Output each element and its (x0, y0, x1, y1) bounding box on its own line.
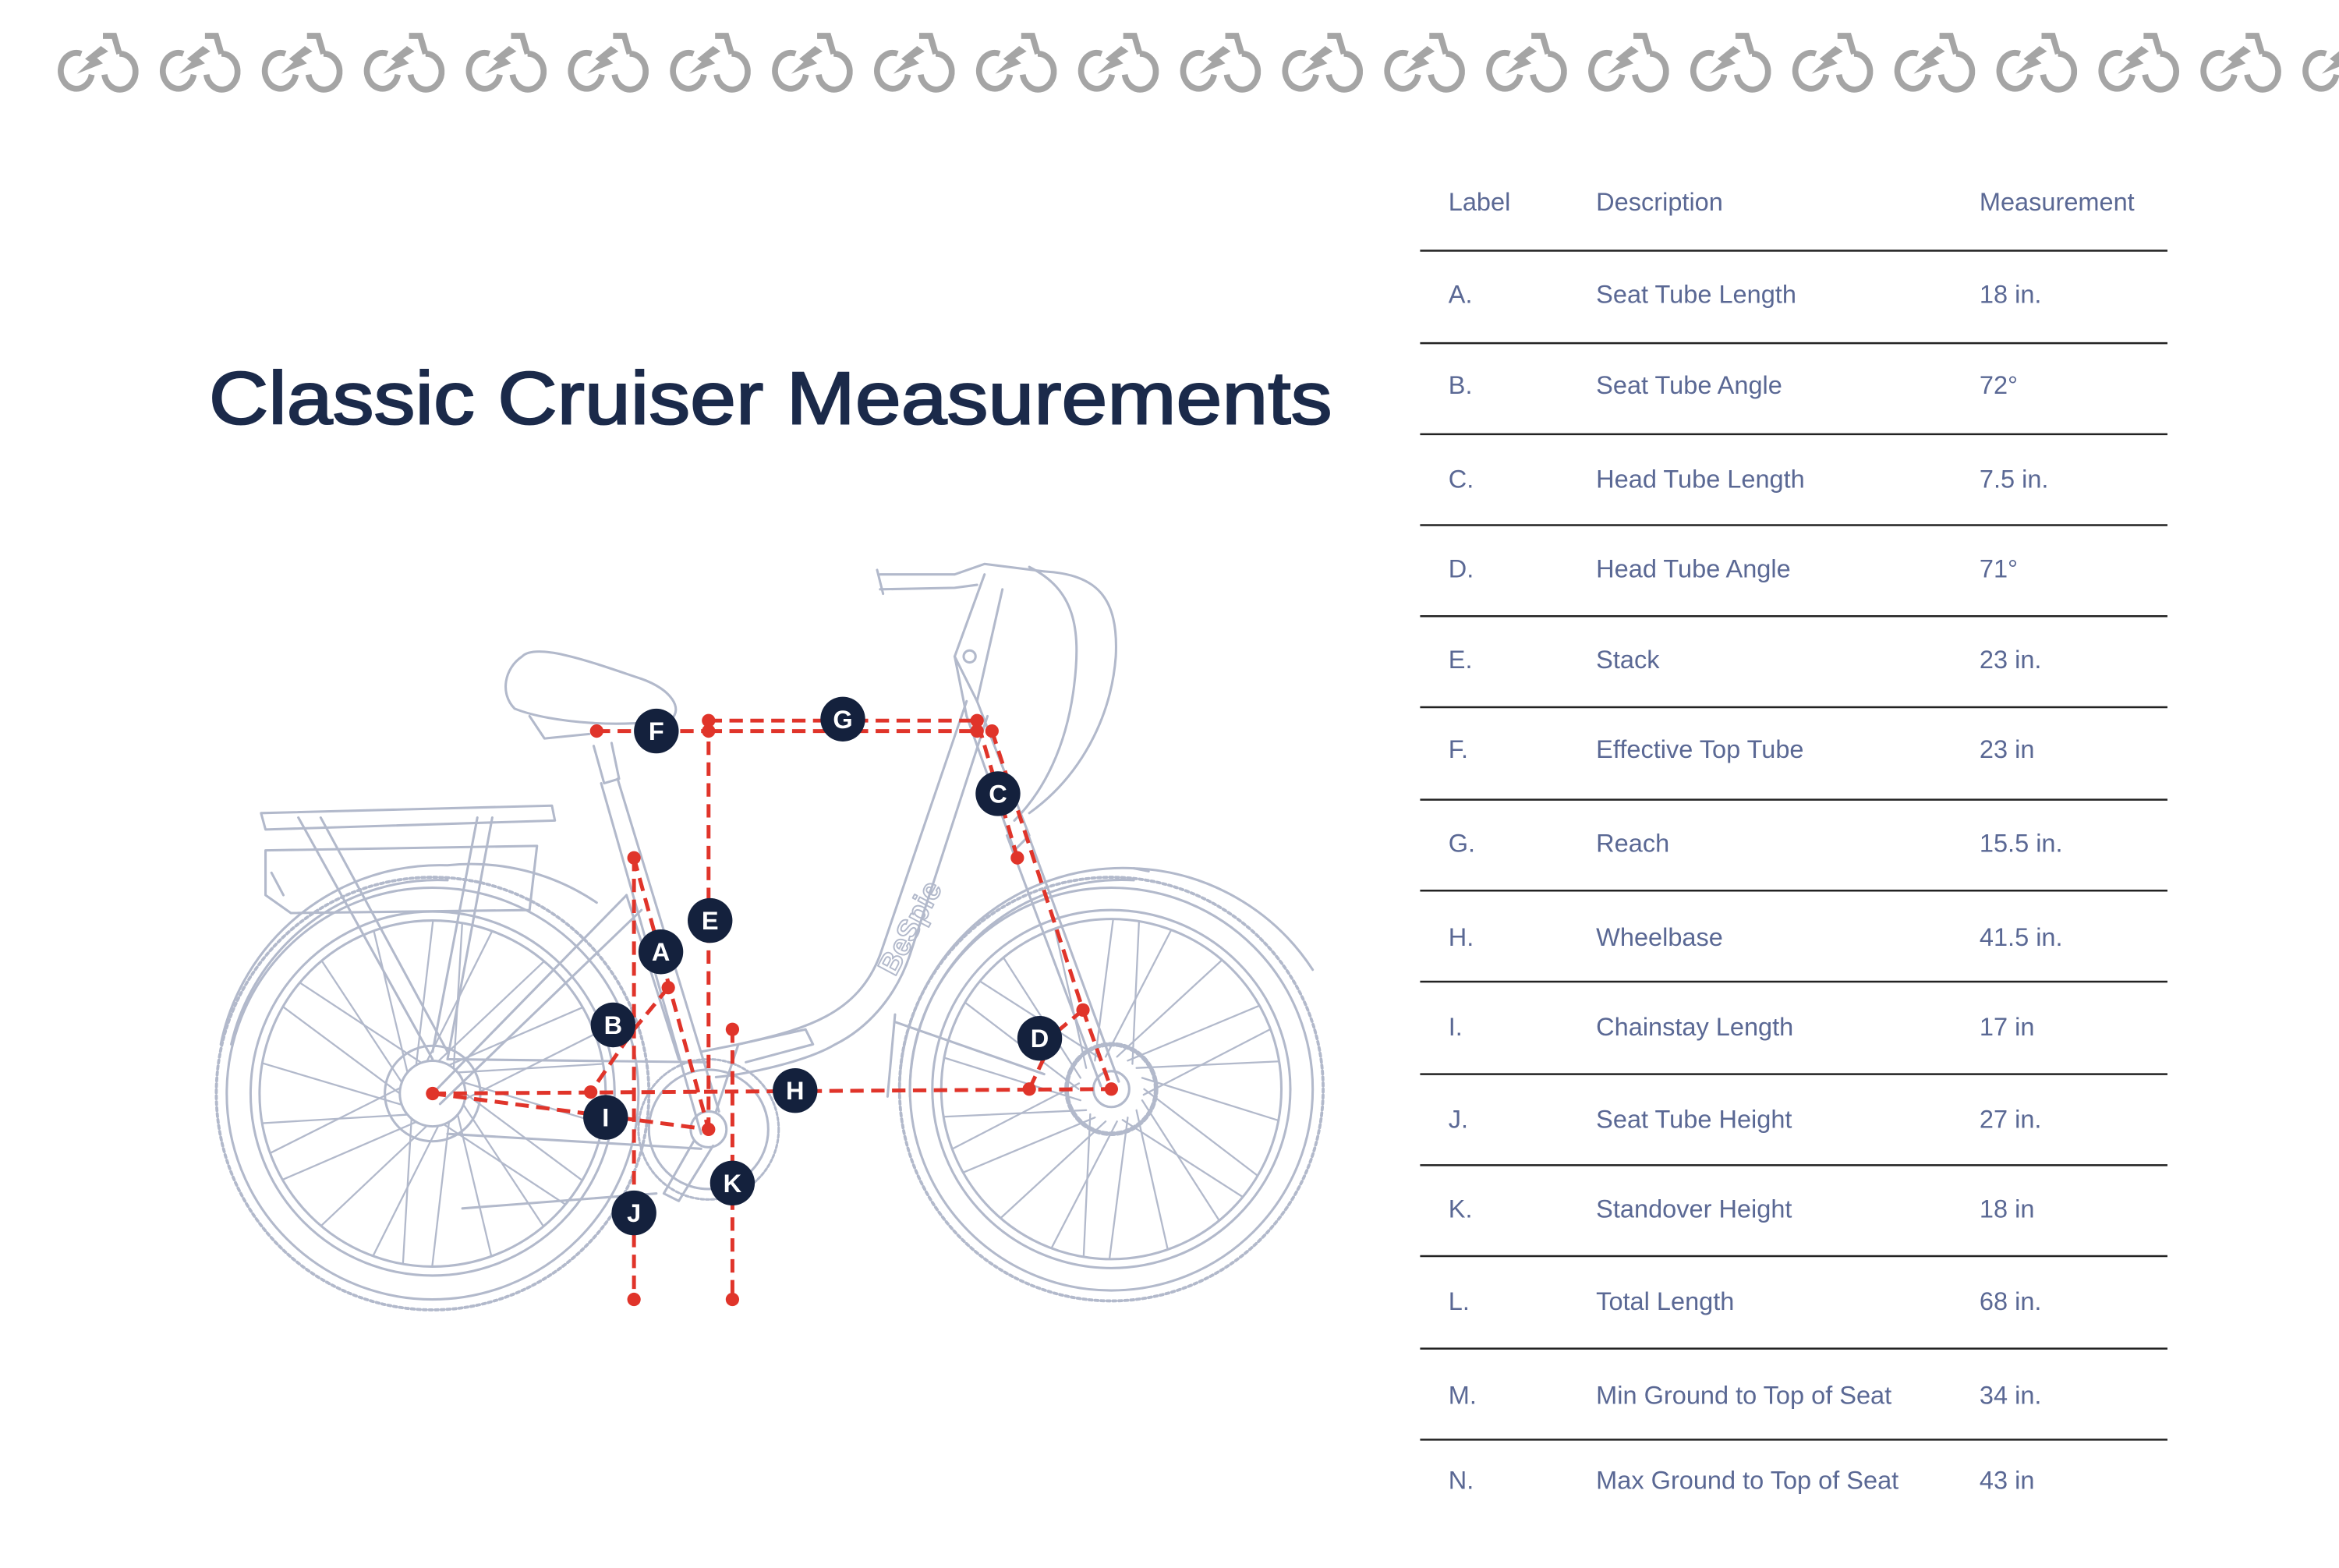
table rows: Standover Height (1596, 1195, 1792, 1223)
marker A: A (652, 938, 670, 966)
table rows: Effective Top Tube (1596, 735, 1804, 763)
table header (1449, 188, 2135, 216)
measurements table (1420, 188, 2167, 1495)
marker K (710, 1161, 755, 1205)
bike illustration (216, 564, 1323, 1310)
table rows: Chainstay Length (1596, 1013, 1793, 1041)
table rows: 15.5 in. (1980, 830, 2063, 858)
table rows: 18 in (1980, 1195, 2034, 1223)
marker G (820, 697, 865, 742)
table rows: 27 in. (1980, 1106, 2041, 1134)
table rows: 18 in. (1980, 280, 2041, 308)
table rows: M. (1449, 1381, 1477, 1409)
table rows: Wheelbase (1596, 923, 1723, 951)
table rows: Reach (1596, 830, 1669, 858)
table header: Description (1596, 188, 1723, 216)
table rows: 71° (1980, 555, 2018, 583)
table rows: 23 in (1980, 735, 2034, 763)
marker I: I (602, 1104, 609, 1132)
marker D (1017, 1016, 1062, 1060)
table rows: 7.5 in. (1980, 465, 2048, 494)
table rows: 17 in (1980, 1013, 2034, 1041)
table rows: 68 in. (1980, 1287, 2041, 1315)
line K (731, 1029, 734, 1300)
marker C: C (989, 780, 1007, 808)
handlebar and stem (880, 564, 1044, 575)
line I (433, 1094, 709, 1129)
table rows (1449, 280, 2063, 1495)
marker H (773, 1068, 817, 1113)
table rows: N. (1449, 1467, 1474, 1495)
line C (978, 725, 1111, 1089)
marker E (688, 898, 732, 943)
line J (633, 858, 635, 1300)
marker I (583, 1095, 628, 1140)
line G (709, 720, 977, 731)
table rows: 72° (1980, 371, 2018, 399)
measurement lines (433, 720, 1111, 1300)
table rows: 34 in. (1980, 1381, 2041, 1409)
marker F (634, 709, 679, 753)
brand text: BeSpie (872, 876, 949, 980)
table rows: L. (1449, 1287, 1470, 1315)
marker F: F (649, 717, 664, 745)
label markers A-K (583, 697, 1062, 1235)
table rows: B. (1449, 371, 1473, 399)
table rows: C. (1449, 465, 1474, 494)
table header: Measurement (1980, 188, 2135, 216)
table rows: H. (1449, 923, 1474, 951)
table rows: Seat Tube Length (1596, 280, 1796, 308)
table rows: 43 in (1980, 1467, 2034, 1495)
marker K: K (724, 1170, 742, 1198)
table rows: A. (1449, 280, 1473, 308)
table rows: Total Length (1596, 1287, 1734, 1315)
table rows: Min Ground to Top of Seat (1596, 1381, 1891, 1409)
title: Classic Cruiser Measurements (209, 356, 1332, 440)
table rows: F. (1449, 735, 1468, 763)
line E (708, 720, 709, 1129)
rear wheel (216, 877, 649, 1310)
seat tube and post (601, 784, 701, 1134)
line A (634, 858, 709, 1129)
table rows: I. (1449, 1013, 1463, 1041)
head tube and fork (954, 657, 1029, 851)
measurement dots (426, 714, 1118, 1306)
marker H: H (786, 1077, 805, 1105)
marker J (611, 1191, 656, 1235)
line D (1029, 1010, 1083, 1089)
table rows: 23 in. (1980, 646, 2041, 674)
marker C (975, 771, 1021, 816)
line B (591, 988, 668, 1092)
chainstays, seatstays (433, 895, 627, 1094)
table rows: Stack (1596, 646, 1660, 674)
marker E: E (702, 907, 719, 935)
table rows: Head Tube Angle (1596, 555, 1791, 583)
table rows: Seat Tube Angle (1596, 371, 1782, 399)
table rows: Seat Tube Height (1596, 1106, 1792, 1134)
marker B: B (604, 1011, 622, 1039)
marker B (591, 1003, 635, 1047)
line F (596, 730, 709, 732)
table rows: G. (1449, 830, 1475, 858)
table rows: Head Tube Length (1596, 465, 1805, 494)
marker G: G (833, 706, 853, 734)
table rows: K. (1449, 1195, 1473, 1223)
table rows: E. (1449, 646, 1473, 674)
chainring (639, 1059, 779, 1199)
table header: Label (1449, 188, 1510, 216)
rack (261, 805, 555, 830)
front wheel (900, 877, 1323, 1301)
icon row: e-bike icons (61, 36, 2339, 90)
table rows: Max Ground to Top of Seat (1596, 1467, 1898, 1495)
marker J: J (627, 1199, 641, 1227)
step-through main frame (701, 701, 967, 1052)
marker A (639, 929, 683, 974)
fenders (900, 868, 1148, 1096)
table rows: J. (1449, 1106, 1468, 1134)
table rows: 41.5 in. (1980, 923, 2063, 951)
saddle (506, 652, 676, 724)
line H (433, 1089, 1111, 1094)
marker D: D (1031, 1025, 1049, 1053)
table rows: D. (1449, 555, 1474, 583)
